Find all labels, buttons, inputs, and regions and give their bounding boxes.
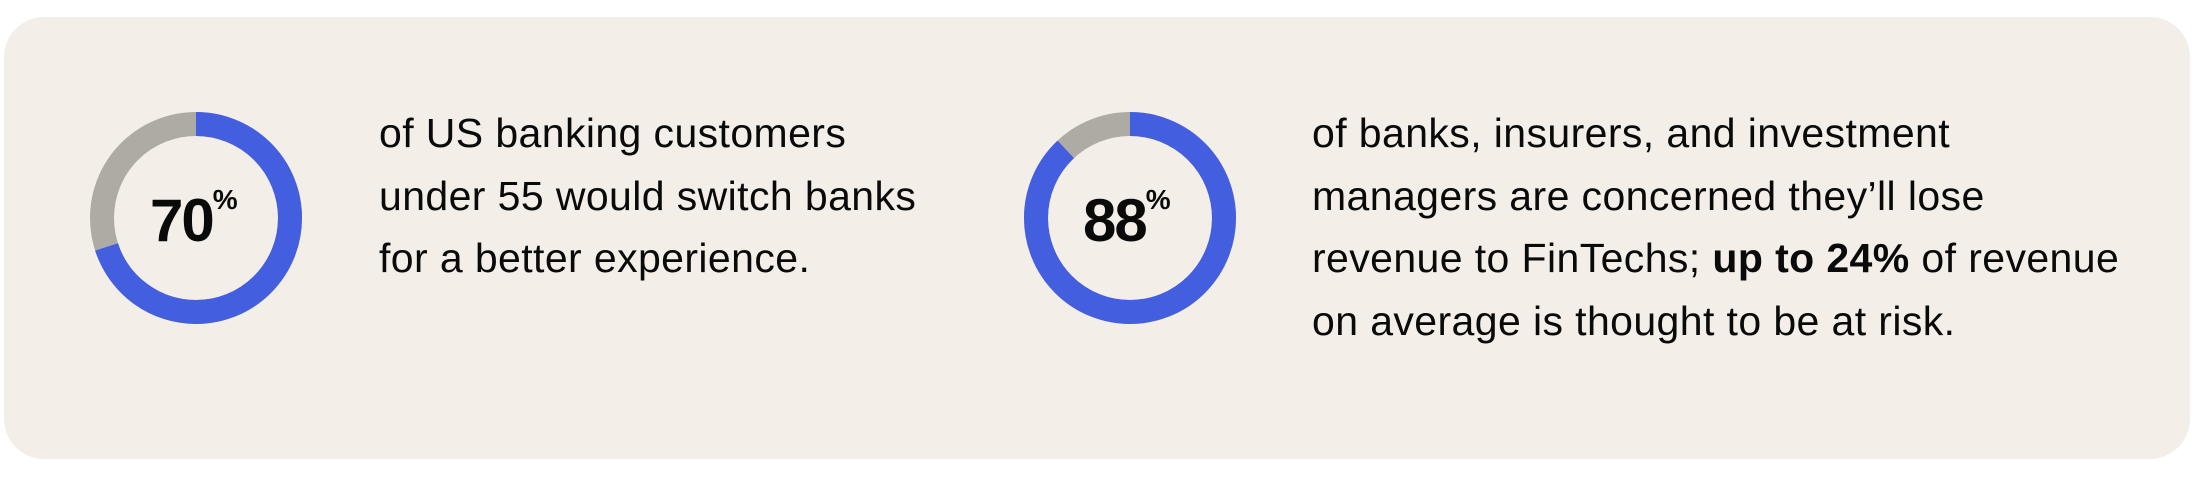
text block: stat 2 description: revenue to FinTechs; up to 24% of revenue: [1312, 235, 2119, 281]
donut chart: 70%: [90, 112, 302, 324]
stat number: 70%: 70%: [150, 184, 238, 254]
text block: stat 1 description: [379, 110, 916, 281]
text block: stat 1 description: of US banking customers: [379, 110, 846, 156]
text block: stat 1 description: under 55 would switch banks: [379, 172, 916, 218]
text block: stat 2 description: of banks, insurers, and investment: [1312, 110, 1950, 156]
stat number: 88%: 88%: [1083, 184, 1171, 254]
text block: stat 2 description: on average is thought to be at risk.: [1312, 298, 1955, 344]
text block: stat 1 description: for a better experience.: [379, 235, 810, 281]
text block: stat 2 description: managers are concerned they’ll lose: [1312, 172, 1985, 218]
text block: stat 2 description: [1312, 110, 2119, 344]
donut chart: 88%: [1024, 112, 1236, 324]
